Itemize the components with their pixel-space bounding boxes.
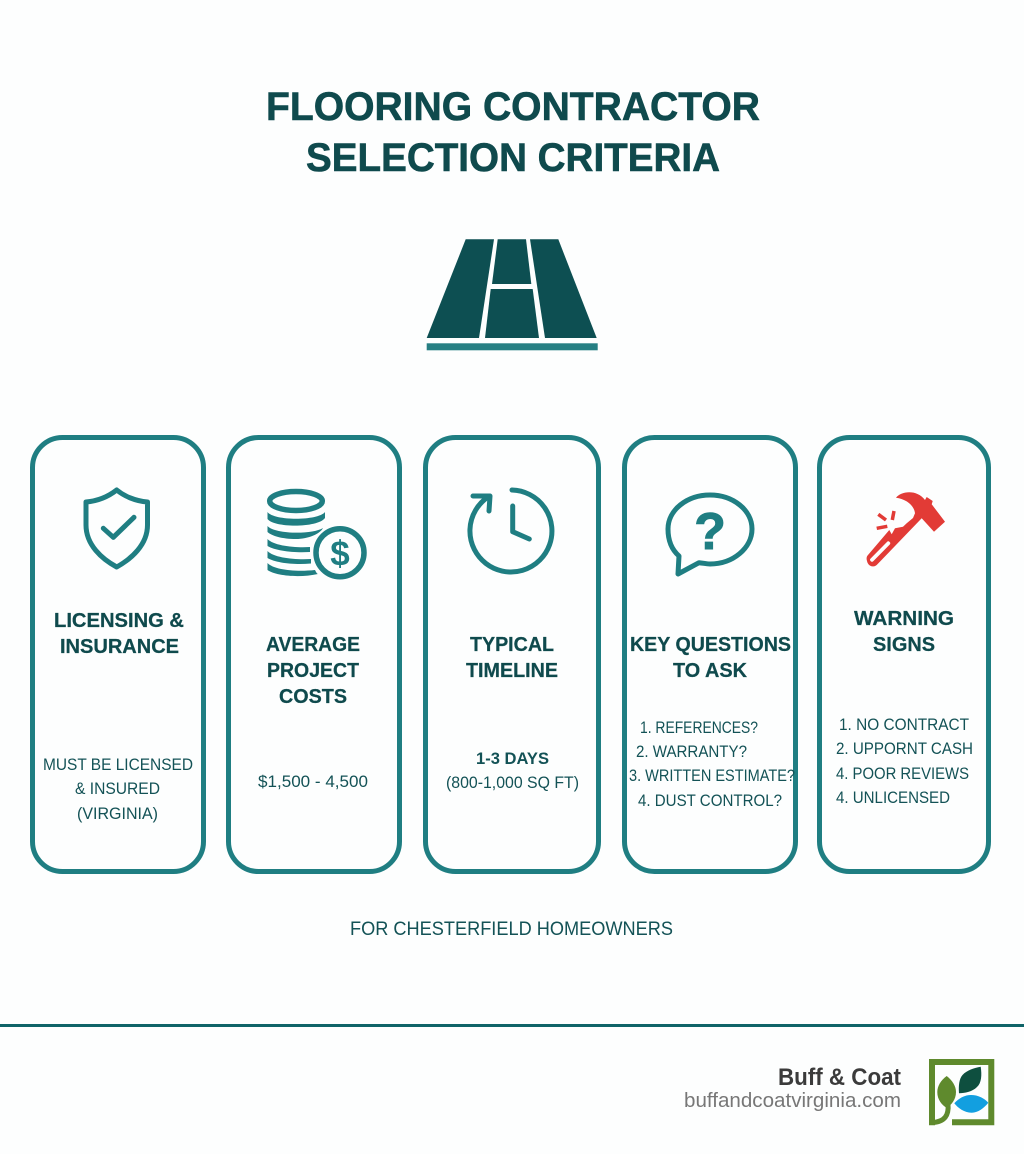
heading: average project costs: COSTS <box>279 685 347 708</box>
heading: licensing and insurance: INSURANCE <box>60 635 179 658</box>
logo: Buff and Coat leaves <box>932 1062 991 1125</box>
icon: broken hammer <box>867 492 945 566</box>
icon: shield with check <box>86 490 148 567</box>
text: cost range: $1,500 - 4,500 <box>258 772 368 791</box>
title: FLOORING CONTRACTOR <box>266 85 760 129</box>
heading: average project costs: PROJECT <box>267 659 359 682</box>
text: timeline detail <box>446 749 579 792</box>
footer brand name and URL: Buff & Coat <box>778 1064 901 1091</box>
icon: speech bubble with question mark: ? <box>694 503 726 561</box>
text: timeline detail: (800-1,000 SQ FT) <box>446 773 579 792</box>
heading: average project costs: AVERAGE <box>266 633 360 656</box>
heading: warning signs: SIGNS <box>873 633 935 656</box>
panel: key questions to ask <box>624 438 796 872</box>
panel: licensing and insurance <box>32 438 204 872</box>
heading: licensing and insurance <box>54 609 184 658</box>
heading: typical timeline <box>466 633 558 682</box>
text: licensing detail: MUST BE LICENSED <box>43 755 193 774</box>
text: licensing detail <box>43 755 193 823</box>
title: SELECTION CRITERIA <box>306 136 720 180</box>
text: warning list: 4. UNLICENSED <box>836 788 950 807</box>
text: warning list: 1. NO CONTRACT <box>839 715 969 734</box>
heading: warning signs: WARNING <box>854 607 954 630</box>
heading: typical timeline: TIMELINE <box>466 659 558 682</box>
text: licensing detail: (VIRGINIA) <box>77 804 158 823</box>
text: question list <box>629 718 795 810</box>
icon: coin stack with dollar: $ <box>330 534 350 574</box>
panel: average project costs <box>228 438 400 872</box>
icon: speech bubble with question mark <box>668 495 752 574</box>
panel: typical timeline <box>426 438 598 872</box>
icon: clock with arrow <box>470 490 552 572</box>
text: warning list: 2. UPPORNT CASH <box>836 739 973 758</box>
heading: key questions to ask: TO ASK <box>673 659 747 682</box>
panel: warning signs <box>820 438 988 872</box>
caption: for Chesterfield homeowners: FOR CHESTERFIELD HOMEOWNERS <box>350 918 673 940</box>
text: warning list <box>836 715 973 807</box>
title <box>266 85 760 180</box>
icon: floor planks <box>427 239 598 350</box>
text: question list: 2. WARRANTY? <box>636 742 747 761</box>
text: question list: 4. DUST CONTROL? <box>638 791 782 810</box>
text: licensing detail: & INSURED <box>75 779 160 798</box>
heading: key questions to ask: KEY QUESTIONS <box>630 633 791 656</box>
footer brand name and URL: buffandcoatvirginia.com <box>684 1090 901 1112</box>
heading: average project costs <box>266 633 360 708</box>
heading: typical timeline: TYPICAL <box>470 633 554 656</box>
text: timeline detail: 1-3 DAYS <box>476 749 549 768</box>
heading: warning signs <box>854 607 954 656</box>
text: warning list: 4. POOR REVIEWS <box>836 764 969 783</box>
heading: key questions to ask <box>630 633 791 682</box>
text: question list: 3. WRITTEN ESTIMATE? <box>629 766 795 785</box>
footer brand name and URL <box>684 1064 901 1112</box>
heading: licensing and insurance: LICENSING & <box>54 609 184 632</box>
text: question list: 1. REFERENCES? <box>640 718 758 737</box>
icon: coin stack with dollar <box>268 492 364 577</box>
